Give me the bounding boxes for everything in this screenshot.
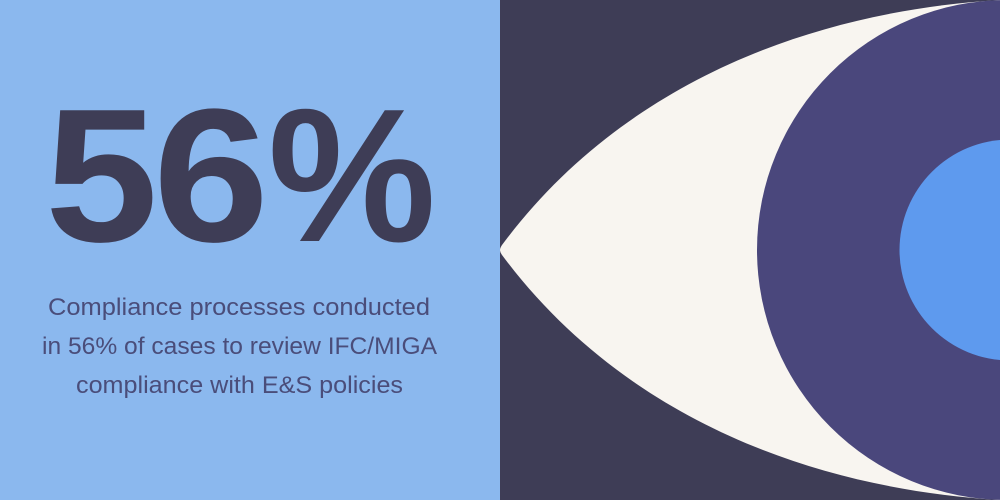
icon: eye white <box>500 0 1000 500</box>
text block: description: in 56% of cases to review IFC/MIGA <box>42 333 437 360</box>
heading: 56%: 6 <box>153 70 269 282</box>
text block: description <box>42 294 437 399</box>
heading: 56%: % <box>268 70 436 282</box>
heading: 56%: 5 <box>45 70 158 282</box>
text block: description: compliance with E&S policies <box>76 372 403 399</box>
panel: statistic <box>0 0 500 500</box>
text block: description: Compliance processes conducted <box>48 294 430 321</box>
icon: eye iris <box>757 0 1000 500</box>
heading: 56% <box>45 70 436 282</box>
panel: eye graphic <box>500 0 1000 500</box>
icon: eye pupil <box>900 140 1000 360</box>
